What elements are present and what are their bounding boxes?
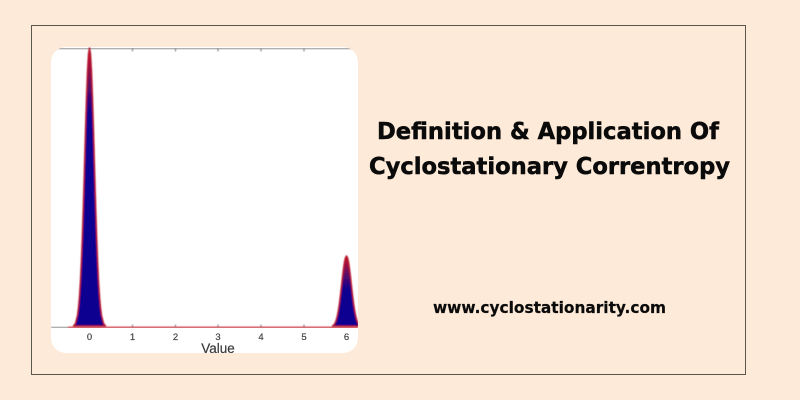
x axis tick labels: 4 xyxy=(258,332,264,343)
x axis tick labels: 3 xyxy=(215,332,221,343)
infographic canvas xyxy=(31,25,746,375)
x axis tick labels: 0 xyxy=(87,332,92,343)
title line 2: Cyclostationary Correntropy xyxy=(369,154,730,180)
peak at value 6 xyxy=(332,256,360,326)
chart baseline axis and ticks xyxy=(51,324,358,328)
title line 1: Definition & Application Of xyxy=(377,119,720,145)
x axis tick labels: 1 xyxy=(130,332,135,343)
website url: www.cyclostationarity.com xyxy=(433,298,666,317)
x axis label: Value xyxy=(201,341,235,356)
x axis tick labels: 5 xyxy=(301,332,307,343)
chart top axis xyxy=(58,48,358,52)
peak at value 0 xyxy=(74,48,106,326)
chart background xyxy=(51,47,358,353)
panel: histogram chart xyxy=(51,47,360,356)
x axis tick labels xyxy=(87,333,349,340)
x axis tick labels: 2 xyxy=(173,332,178,343)
x axis tick labels: 6 xyxy=(344,332,349,343)
outer frame xyxy=(32,26,746,374)
title xyxy=(369,119,730,180)
